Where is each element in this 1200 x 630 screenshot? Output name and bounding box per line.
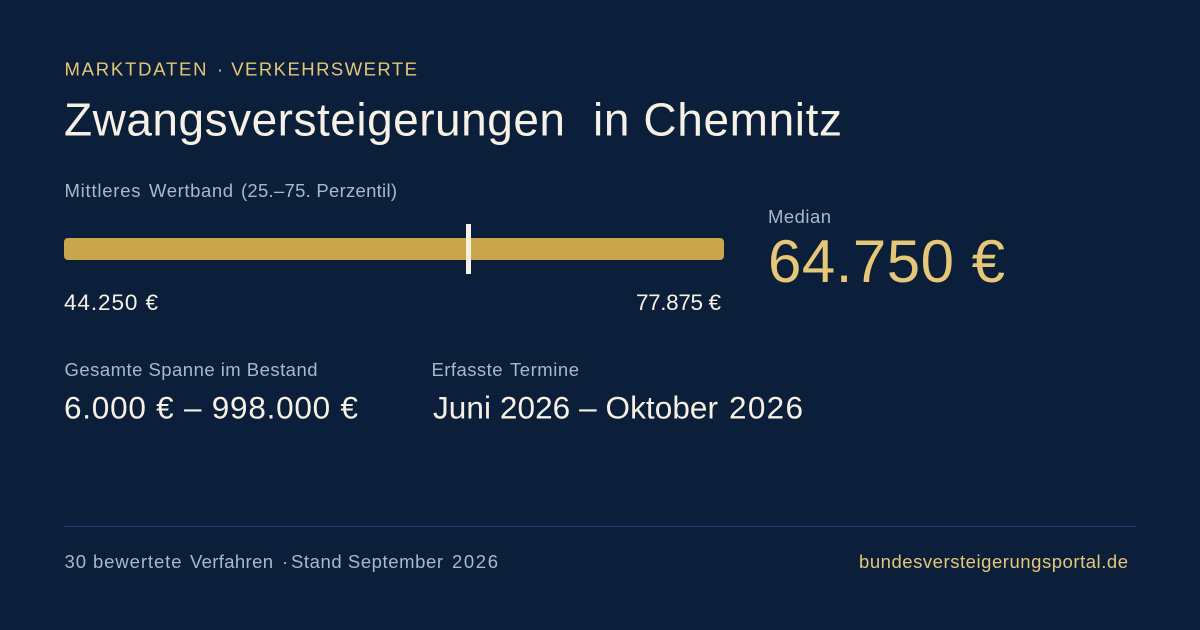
footer source: bundesversteigerungsportal.de: [859, 551, 1128, 572]
title: [64, 94, 842, 146]
band label: Wertband: [149, 180, 233, 201]
title: Zwangsversteigerungen: [64, 94, 565, 146]
dates value: Juni 2026 – Oktober: [433, 390, 718, 426]
dates label: Erfasste: [432, 359, 502, 380]
footer note: 30 bewertete: [64, 551, 182, 572]
dates label: [432, 359, 579, 380]
band label: Mittleres: [64, 180, 140, 201]
footer note: Stand September: [291, 551, 443, 572]
band label: [64, 180, 397, 201]
dates value: 2026: [729, 390, 803, 426]
median value: 64.750 €: [768, 228, 1005, 295]
bar: interquartile band: [64, 238, 724, 260]
median marker: [466, 224, 471, 274]
upper bound value: 77.875 €: [636, 290, 721, 315]
band label: (25.–75. Perzentil): [241, 180, 397, 201]
title: in Chemnitz: [593, 94, 842, 146]
lower bound value: 44.250 €: [64, 290, 158, 315]
total range value: 6.000 € – 998.000 €: [64, 390, 358, 426]
footer note: ·: [282, 551, 288, 572]
eyebrow: MARKTDATEN: [64, 58, 206, 80]
median label: Median: [768, 206, 831, 227]
footer note: 2026: [452, 551, 498, 572]
dates label: Termine: [510, 359, 579, 380]
range bar chart: [64, 224, 724, 274]
eyebrow: [64, 58, 417, 80]
footer note: [64, 551, 498, 572]
footer note: Verfahren: [190, 551, 273, 572]
total range label: Gesamte Spanne im Bestand: [64, 359, 318, 380]
eyebrow: · VERKEHRSWERTE: [217, 58, 417, 80]
